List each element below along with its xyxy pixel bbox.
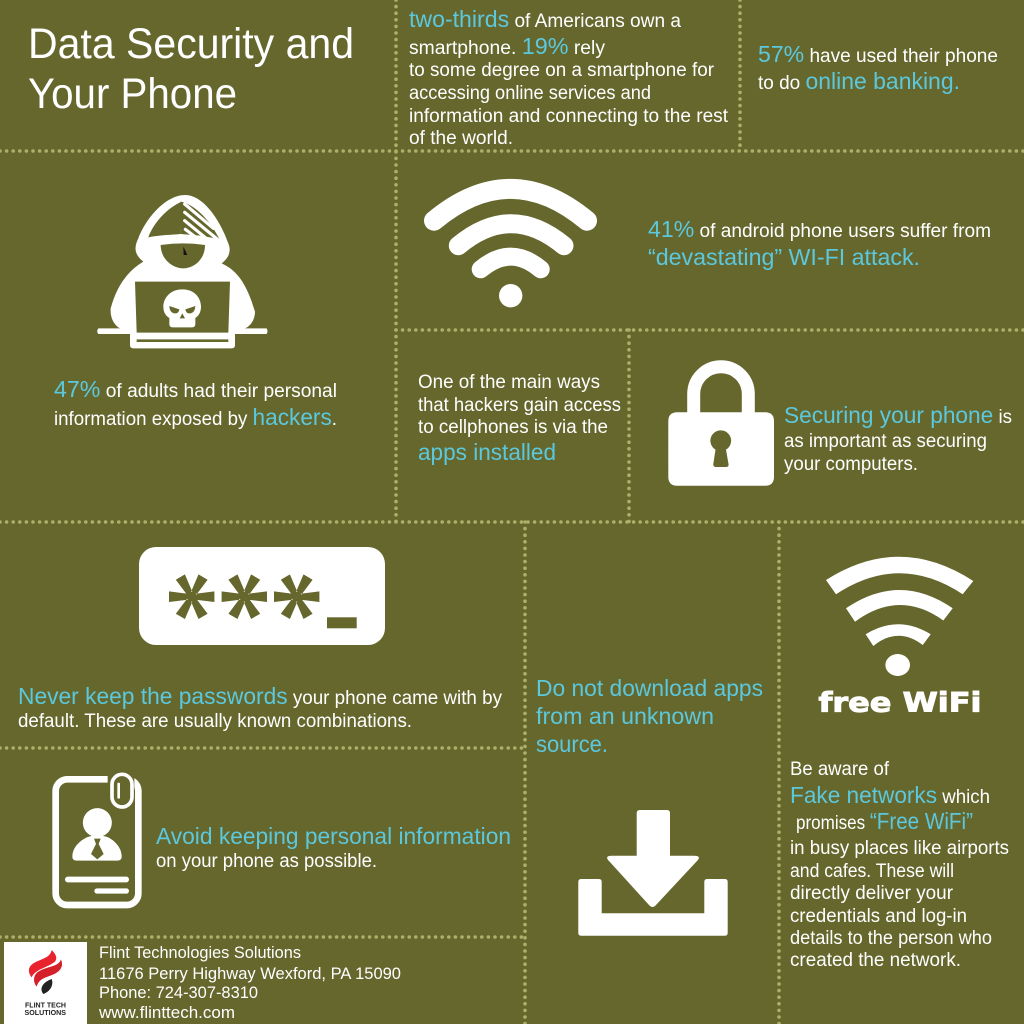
text block: fake networks: created the network.	[790, 950, 961, 971]
text block: unknown source: Do not download apps	[536, 675, 763, 701]
text block: passwords: default. These are usually known combinations.	[18, 711, 412, 732]
text block: wifi attack: 41% of android phone users suffer from	[648, 216, 991, 242]
title	[28, 20, 354, 118]
text block: securing your phone: as important as securing	[784, 431, 987, 452]
text block: securing your phone	[784, 402, 1012, 475]
text block: online banking: to do online banking.	[758, 68, 960, 94]
text block: fake networks	[790, 759, 1009, 971]
text block: smartphone ownership: two-thirds of Americans own a	[409, 6, 681, 32]
text block: passwords	[18, 683, 502, 732]
footer contact details: Phone: 724-307-8310	[99, 983, 258, 1002]
text block: smartphone ownership	[409, 6, 729, 149]
text block: personal information: Avoid keeping personal information	[156, 823, 511, 849]
text block: smartphone ownership: of the world.	[409, 128, 513, 149]
text block: fake networks: Be aware of	[790, 759, 890, 780]
icon: contact card with paperclip	[56, 772, 138, 905]
text block: adults exposed: 47% of adults had their personal	[54, 376, 337, 402]
logo: Flint Tech Solutions: FLINT TECH	[25, 1000, 66, 1010]
text block: online banking	[758, 41, 998, 94]
logo: Flint Tech Solutions: SOLUTIONS	[24, 1008, 66, 1017]
text block: fake networks: credentials and log-in	[790, 906, 967, 927]
text block: fake networks: in busy places like airports	[790, 838, 1009, 859]
text block: apps installed: One of the main ways	[418, 372, 600, 393]
logo: Flint Tech Solutions	[4, 942, 87, 1024]
text block: fake networks: promises “Free WiFi”	[796, 808, 973, 834]
text block: fake networks: and cafes. These will	[790, 861, 954, 882]
text block: fake networks: Fake networks which	[790, 782, 990, 808]
text block: smartphone ownership: to some degree on a smartphone for	[409, 60, 715, 81]
text block: fake networks: details to the person who	[790, 928, 992, 949]
footer contact details: www.flinttech.com	[98, 1003, 235, 1022]
footer contact details: 11676 Perry Highway Wexford, PA 15090	[99, 964, 401, 983]
text block: apps installed: to cellphones is via the	[418, 417, 608, 438]
icon: padlock	[668, 367, 774, 486]
text block: adults exposed	[54, 376, 337, 430]
text block: passwords: Never keep the passwords your phone came with by	[18, 683, 502, 709]
text block: apps installed: apps installed	[418, 439, 556, 465]
text block: online banking: 57% have used their phone	[758, 41, 998, 67]
text block: wifi attack: “devastating” WI-FI attack.	[648, 244, 920, 270]
text block: unknown source: source.	[536, 731, 608, 757]
footer contact details	[98, 943, 401, 1022]
text block: personal information	[156, 823, 511, 872]
text block: wifi attack	[648, 216, 991, 270]
icon: password box	[139, 547, 385, 645]
text block: smartphone ownership: accessing online services and	[409, 83, 651, 104]
text block: adults exposed: information exposed by hackers.	[54, 404, 337, 430]
icon: download	[578, 810, 728, 936]
icon: hacker with laptop	[97, 195, 267, 348]
icon: free wifi: free WiFi	[818, 688, 982, 719]
text block: securing your phone: Securing your phone is	[784, 402, 1012, 428]
text block: securing your phone: your computers.	[784, 454, 918, 475]
icon: free wifi	[818, 557, 982, 719]
text block: personal information: on your phone as possible.	[156, 851, 377, 872]
text block: apps installed	[418, 372, 621, 465]
title: Your Phone	[28, 70, 237, 118]
text block: smartphone ownership: information and connecting to the rest	[409, 106, 729, 127]
icon: wifi	[434, 189, 587, 307]
text block: smartphone ownership: smartphone. 19% rely	[409, 33, 605, 59]
footer contact details: Flint Technologies Solutions	[99, 943, 301, 962]
text block: apps installed: that hackers gain access	[418, 395, 621, 416]
title: Data Security and	[28, 20, 354, 68]
text block: unknown source	[536, 675, 763, 757]
text block: unknown source: from an unknown	[536, 703, 714, 729]
text block: fake networks: directly deliver your	[790, 883, 954, 904]
